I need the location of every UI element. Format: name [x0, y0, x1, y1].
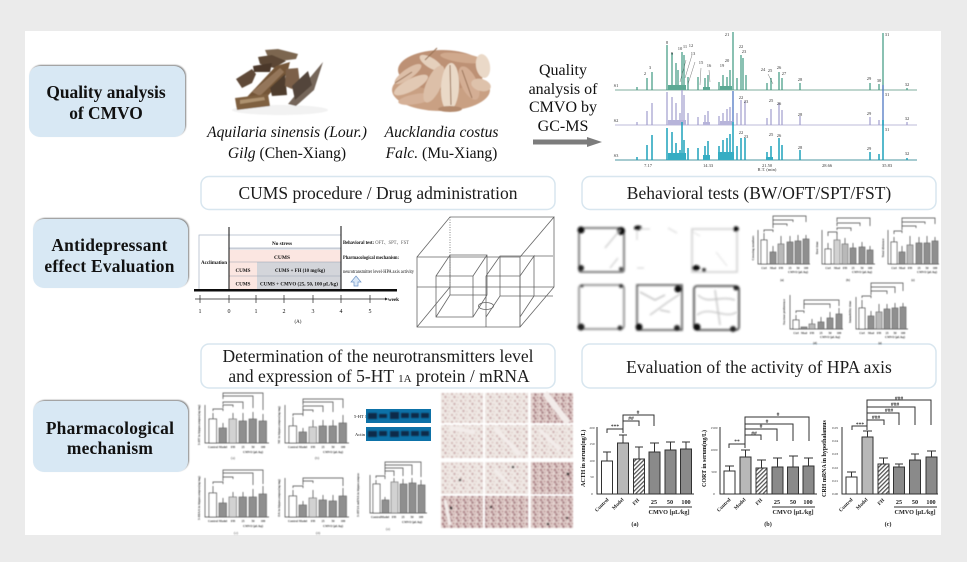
bar chart: 5-HT1A mRNA (e): 100 — [419, 515, 424, 519]
bar chart: neurotransmitter (a): Model — [219, 445, 227, 449]
bar chart: neurotransmitter (b): NE in hippocampus(ng/mg) — [277, 406, 281, 444]
small bar chart: behavior (c): Mod — [899, 266, 905, 270]
bar chart: CORT in serum (b): CMVO [μL/kg] — [772, 509, 814, 516]
bar chart: neurotransmitter (d): CMVO (μL/kg) — [323, 524, 343, 528]
heading: Evaluation of HPA axis: Evaluation of the activity of HPA axis — [626, 357, 892, 377]
caption: Aucklandia costus — [384, 124, 498, 162]
small bar chart: behavior (a) — [751, 216, 810, 282]
western blot: 5-HT1A and actin: Actin — [355, 432, 366, 437]
schedule notes — [343, 240, 415, 275]
peak numbers: 32 — [905, 116, 909, 121]
bar chart: neurotransmitter (d): 25 — [322, 519, 325, 523]
peak numbers: 31 — [885, 92, 889, 97]
heading: Evaluation of HPA axis — [582, 344, 936, 388]
small bar chart: behavior (a): Crossing numbers — [751, 235, 755, 260]
week axis — [195, 295, 400, 325]
week axis: 3 — [312, 309, 314, 315]
peak numbers: S2 — [614, 118, 618, 123]
apparatus: 3D test box — [417, 217, 554, 327]
peak numbers: 22 — [739, 44, 743, 49]
bar chart: neurotransmitter (c): CMVO (μL/kg) — [243, 524, 263, 528]
small bar chart: behavior (e): Mod — [868, 331, 874, 335]
small bar chart: behavior (c): 50 — [926, 266, 929, 270]
peak numbers: 21 — [725, 32, 729, 37]
western blot: 5-HT1A and actin: 5-HT 1A — [354, 414, 371, 419]
bar chart: neurotransmitter (b): 50 — [332, 445, 335, 449]
text: Quality analysis of CMVO by GC-MS — [529, 62, 598, 135]
peak numbers: 30 — [877, 78, 882, 83]
peak numbers: 28 — [798, 112, 803, 117]
small bar chart: behavior (c): 25 — [918, 266, 921, 270]
small bar chart: behavior (e): Immobility time — [848, 300, 852, 323]
peak numbers: 24 — [761, 67, 766, 72]
peak numbers: 13 — [691, 51, 696, 56]
bar chart: CRH mRNA in hypothalamus (c): FH — [877, 498, 886, 507]
peak numbers: 20 — [725, 58, 730, 63]
bar chart: neurotransmitter (a): (a) — [231, 456, 236, 460]
bar chart: neurotransmitter (a): Control — [208, 445, 218, 449]
week axis: 5 — [368, 309, 372, 315]
IHC micrographs — [441, 393, 573, 528]
bar chart: neurotransmitter (c): 25 — [242, 519, 245, 523]
peak numbers: 25 — [768, 68, 773, 73]
caption: Aucklandia costus: Falc. (Mu-Xiang) — [385, 145, 497, 162]
small bar chart: behavior (e): FH — [877, 331, 882, 335]
peak numbers: 11 — [683, 44, 687, 49]
caption: Aquilaria sinensis — [206, 124, 367, 162]
text: Quality analysis of CMVO by GC-MS: GC-MS — [538, 118, 588, 135]
row label: Quality analysis of CMVO: Quality analysis — [46, 82, 166, 102]
bar chart: neurotransmitter (b) — [277, 399, 349, 460]
small bar chart: behavior (d): 50 — [828, 331, 832, 335]
bar chart: CRH mRNA in hypothalamus (c) — [822, 396, 938, 528]
bar chart: ACTH in serum (a) — [580, 410, 694, 528]
bar chart: ACTH in serum (a): ## — [628, 416, 634, 422]
small bar chart: behavior (a): 25 — [788, 266, 792, 270]
row label: Antidepressant effect Evaluation: Antidepressant — [51, 235, 168, 255]
bar chart: ACTH in serum (a): (a) — [631, 521, 639, 528]
time axis — [644, 163, 893, 172]
schedule notes: neurotransmitter level·HPA axis activity — [343, 270, 415, 275]
small bar chart: behavior (e): 100 — [901, 331, 906, 335]
bar chart: neurotransmitter (a): 25 — [242, 445, 245, 449]
bar chart: CORT in serum (b): 500 — [711, 470, 717, 474]
small bar chart: behavior (d): Ctrl — [793, 331, 799, 335]
bar chart: neurotransmitter (c): (c) — [234, 531, 239, 535]
peak numbers: 26 — [777, 133, 782, 138]
schedule notes: Pharmacological mechanism: — [343, 255, 399, 261]
bar chart: CORT in serum (b): Model — [733, 497, 748, 511]
thick time bar — [194, 289, 397, 292]
small bar chart: behavior (c): Total distance — [881, 238, 885, 257]
peak numbers — [614, 32, 909, 158]
text: Quality analysis of CMVO by GC-MS: CMVO by — [529, 99, 597, 116]
bar chart: neurotransmitter (d): (d) — [316, 531, 321, 535]
peak numbers: 15 — [699, 60, 704, 65]
trace S2 — [615, 85, 917, 125]
peak numbers: S3 — [614, 153, 619, 158]
bar chart: neurotransmitter (c): 5-HIAA in hippocampus(ng/mg) — [197, 476, 201, 520]
bar chart: neurotransmitter (c): Control — [208, 519, 218, 523]
bar chart: CRH mRNA in hypothalamus (c): Model — [855, 497, 870, 511]
heading: Determination of neurotransmitters — [201, 344, 555, 388]
heading: Behavioral tests — [582, 176, 936, 210]
bar chart: neurotransmitter (d): Model — [299, 519, 307, 523]
small bar chart: behavior (c): Ctrl — [891, 266, 897, 270]
trace C2 — [634, 226, 677, 268]
bar chart: ACTH in serum (a): 50 — [590, 475, 594, 479]
peak numbers: 27 — [782, 71, 787, 76]
small bar chart: behavior (c): FH — [908, 266, 913, 270]
row label: Pharmacological mechanism — [33, 401, 188, 472]
peak numbers: 2 — [644, 71, 646, 76]
schedule notes: Behavioral test: OFT、SPT、FST — [343, 240, 410, 246]
treatment rows: CUMS — [236, 282, 250, 288]
peak numbers: 9 — [671, 51, 674, 56]
peak numbers: 31 — [885, 127, 889, 132]
small bar chart: behavior (e): CMVO (μL/kg) — [885, 335, 905, 339]
trace S3 — [615, 120, 917, 160]
week axis: 2 — [282, 309, 286, 315]
small bar chart: behavior (a): CMVO (μL/kg) — [788, 270, 808, 274]
week axis: 1 — [254, 309, 258, 315]
text: Quality analysis of CMVO by GC-MS: analysis of — [529, 81, 598, 98]
small bar chart: behavior (b): Mod — [834, 266, 840, 270]
timeline: CUMS procedure — [194, 226, 415, 325]
treatment rows: Acclimation — [201, 260, 227, 266]
trace C1 — [578, 226, 625, 272]
bar chart: CRH mRNA in hypothalamus (c): ### — [891, 402, 899, 408]
week axis: week — [388, 297, 400, 303]
trace S1 — [615, 32, 917, 90]
small bar chart: behavior (b): 50 — [860, 266, 864, 270]
bar chart: 5-HT1A mRNA (e): FH — [392, 515, 397, 519]
caption: Aucklandia costus: Aucklandia costus — [384, 124, 498, 141]
peak numbers: 29 — [867, 146, 872, 151]
peak numbers: 28 — [798, 77, 803, 82]
bar chart: CRH mRNA in hypothalamus (c): ### — [885, 408, 893, 414]
small bar chart: behavior (a): 100 — [804, 266, 809, 270]
bar chart: neurotransmitter (b): Control — [288, 445, 298, 449]
bar chart: neurotransmitter (b): (b) — [315, 456, 320, 460]
small bar chart: behavior (e): Ctrl — [859, 331, 865, 335]
icon: up arrow — [351, 276, 361, 286]
arrow — [533, 137, 602, 147]
time axis: R.T. (min) — [758, 167, 777, 172]
small bar chart: behavior (d): CMVO (μL/kg) — [820, 335, 840, 339]
caption: Aquilaria sinensis: Aquilaria sinensis (Lour.) — [206, 124, 367, 141]
bar chart: neurotransmitter (d): 50 — [332, 519, 335, 523]
photo: Chen-Xiang agarwood pieces — [232, 49, 328, 115]
week axis: 1 — [198, 309, 202, 315]
small bar chart: behavior (b): FH — [843, 266, 848, 270]
bar chart: ACTH in serum (a): 200 — [589, 426, 595, 430]
bar chart: 5-HT1A mRNA (e): Control — [371, 515, 381, 519]
bar chart: CORT in serum (b): CORT in serum(ng/L) — [701, 430, 708, 487]
small bar chart: behavior (b): 100 — [868, 266, 873, 270]
peak numbers: 31 — [885, 32, 889, 37]
bar chart: neurotransmitter (b): Model — [299, 445, 307, 449]
small bar chart: behavior (b): (b) — [846, 278, 850, 282]
bar chart: CRH mRNA in hypothalamus (c): 0.03 — [832, 452, 838, 456]
peak numbers: 22 — [739, 95, 743, 100]
bar chart: neurotransmitter (a): CMVO (μL/kg) — [243, 450, 263, 454]
small bar chart: behavior (e): (e) — [878, 341, 882, 345]
bar chart: CORT in serum (b): # — [760, 424, 763, 430]
bar chart: ACTH in serum (a): 50 — [667, 499, 673, 506]
bar chart: ACTH in serum (a): 0 — [591, 492, 593, 496]
heading: Behavioral tests: Behavioral tests (BW/OFT/SPT/FST) — [627, 183, 891, 203]
bar chart: ACTH in serum (a): ACTH in serum(ng/L) — [580, 430, 587, 487]
small bar chart: behavior (a): 50 — [796, 266, 800, 270]
peak numbers: 12 — [689, 43, 693, 48]
bar chart: 5-HT1A mRNA (e): Model — [381, 515, 389, 519]
peak numbers: 25 — [769, 98, 774, 103]
treatment rows: CUMS — [236, 268, 250, 274]
trace C5 — [636, 285, 682, 331]
open field traces — [578, 226, 739, 332]
bar chart: neurotransmitter (b): FH — [311, 445, 316, 449]
peak numbers: S1 — [614, 83, 618, 88]
bar chart: neurotransmitter (b): 100 — [341, 445, 346, 449]
bar chart: neurotransmitter (d): FH — [311, 519, 316, 523]
peak numbers: 32 — [905, 151, 909, 156]
treatment rows: No stress — [272, 241, 292, 247]
small bar chart: behavior (a): FH — [779, 266, 784, 270]
bar chart: CORT in serum (b): FH — [755, 498, 764, 507]
bar chart: CORT in serum (b): # — [777, 412, 780, 418]
bar chart: CRH mRNA in hypothalamus (c): 100 — [926, 499, 936, 506]
time axis: 35.83 — [882, 163, 893, 168]
time axis: 7.17 — [644, 163, 653, 168]
bar chart: ACTH in serum (a): 150 — [589, 442, 595, 446]
bar chart: CORT in serum (b): 1000 — [710, 448, 718, 452]
caption: Aquilaria sinensis: Gilg (Chen-Xiang) — [228, 145, 346, 162]
heading: Determination of neurotransmitters: and expression of 5-HT 1A protein / mRNA — [228, 366, 530, 386]
bar chart: neurotransmitter (d): DA in hippocampus(ng/mg) — [277, 479, 281, 517]
bar chart: CORT in serum (b): 0 — [713, 492, 715, 496]
bar chart: ACTH in serum (a): CMVO [μL/kg] — [648, 509, 690, 516]
bar chart: CORT in serum (b): (b) — [764, 521, 772, 528]
trace C4 — [578, 284, 624, 330]
bar chart: 5-HT1A mRNA (e) — [356, 462, 427, 531]
bar chart: CORT in serum (b): Control — [716, 497, 733, 513]
bar chart: neurotransmitter (c): 100 — [261, 519, 266, 523]
bar chart: neurotransmitter (c): 50 — [252, 519, 255, 523]
western blot: 5-HT1A and actin — [354, 409, 431, 441]
heading: CUMS procedure: CUMS procedure / Drug administration — [239, 183, 518, 203]
small bar chart: behavior (d): Mod — [801, 331, 807, 335]
small bar chart: behavior (d) — [782, 295, 843, 345]
bar chart: ACTH in serum (a): 100 — [589, 459, 595, 463]
week axis: 4 — [340, 309, 342, 315]
bar chart: neurotransmitter (b): CMVO (μL/kg) — [323, 450, 343, 454]
peak numbers: 32 — [905, 82, 909, 87]
row label: Quality analysis of CMVO — [29, 66, 185, 137]
bar chart: CRH mRNA in hypothalamus (c): ### — [872, 415, 880, 421]
bar chart: CORT in serum (b): 25 — [774, 499, 780, 506]
peak numbers: 26 — [777, 65, 782, 70]
bar chart: ACTH in serum (a): 25 — [651, 499, 657, 506]
bar chart: CRH mRNA in hypothalamus (c): *** — [856, 422, 864, 428]
peak numbers: 28 — [798, 145, 803, 150]
bar chart: CRH mRNA in hypothalamus (c): 0.02 — [832, 466, 838, 470]
small bar chart: behavior (e): 50 — [894, 331, 897, 335]
small bar chart: behavior (c): 100 — [933, 266, 938, 270]
small bar chart: behavior (b): CMVO (μL/kg) — [852, 270, 872, 274]
trace C6 — [694, 286, 739, 332]
text: Quality analysis of CMVO by GC-MS: Quality — [539, 62, 587, 79]
bar chart: neurotransmitter (d): Control — [288, 519, 298, 523]
small bar chart: behavior (d): 100 — [837, 331, 842, 335]
bar chart: 5-HT1A mRNA (e): 5-HT1A mRNA in hippocampus — [356, 472, 360, 517]
peak leader lines — [680, 55, 773, 85]
bar chart: CORT in serum (b): # — [766, 419, 769, 425]
small bar chart: behavior (c) — [881, 218, 939, 282]
bar chart: ACTH in serum (a): *** — [611, 424, 619, 430]
bar chart: CORT in serum (b): 1500 — [710, 426, 718, 430]
bar chart: ACTH in serum (a): # — [637, 410, 640, 416]
peak numbers: 3 — [649, 65, 652, 70]
chromatogram: GC-MS S1 S2 S3 — [614, 32, 917, 172]
bar chart: neurotransmitter (b): 25 — [322, 445, 325, 449]
bar chart: CRH mRNA in hypothalamus (c): 0.00 — [832, 492, 838, 496]
bar chart: ACTH in serum (a): Control — [594, 497, 611, 513]
bar chart: CRH mRNA in hypothalamus (c): CMVO [μL/kg] — [894, 509, 936, 516]
treatment rows — [199, 226, 341, 290]
bar chart: neurotransmitter (d) — [277, 478, 349, 535]
peak numbers: 19 — [720, 63, 725, 68]
peak numbers: 16 — [707, 63, 712, 68]
bar chart: CORT in serum (b) — [701, 412, 817, 528]
row label: Antidepressant effect Evaluation: effect Evaluation — [44, 256, 175, 276]
small bar chart: behavior (d): 25 — [820, 331, 823, 335]
bar chart: 5-HT1A mRNA (e): 50 — [410, 515, 414, 519]
small bar chart: behavior (b): Rest time — [815, 241, 819, 254]
peak numbers: 8 — [666, 40, 669, 45]
peak numbers: 23 — [742, 49, 747, 54]
bar chart: neurotransmitter (a): 100 — [261, 445, 266, 449]
row label: Antidepressant effect Evaluation — [33, 219, 188, 288]
bar chart: CORT in serum (b): ## — [751, 431, 757, 437]
small bar chart: behavior (e): 25 — [886, 331, 889, 335]
bar chart: CRH mRNA in hypothalamus (c): ### — [895, 396, 903, 402]
bar chart: ACTH in serum (a): Model — [611, 497, 626, 511]
peak numbers: 29 — [867, 76, 872, 81]
bar chart: neurotransmitter (a): 50 — [252, 445, 255, 449]
treatment rows: CUMS — [274, 255, 290, 261]
small bar chart: behavior (b) — [815, 218, 875, 282]
treatment rows: CUMS + CMVO (25, 50, 100 μL/kg) — [260, 280, 338, 288]
small bar chart: behavior (d): FH — [810, 331, 815, 335]
bar chart: 5-HT1A mRNA (e): (e) — [386, 527, 391, 531]
small bar chart: behavior (b): 25 — [852, 266, 855, 270]
week axis: 0 — [228, 309, 230, 315]
time axis: 28.66 — [822, 163, 833, 168]
peak numbers: 25 — [769, 132, 774, 137]
peak numbers: 23 — [744, 134, 749, 139]
small bar chart: behavior (a): Mod — [770, 266, 776, 270]
bar chart: CRH mRNA in hypothalamus (c): 0.04 — [832, 439, 838, 443]
small bar chart: behavior (d): (d) — [813, 341, 817, 345]
heading: CUMS procedure — [201, 176, 555, 210]
bar chart: neurotransmitter (a): FH — [231, 445, 236, 449]
small bar chart: behavior (e) — [848, 283, 908, 345]
peak numbers: 10 — [678, 46, 683, 51]
bar chart: CRH mRNA in hypothalamus (c): 50 — [912, 499, 918, 506]
small bar chart: behavior (a): Ctrl — [761, 266, 767, 270]
bar chart: neurotransmitter (c): Model — [219, 519, 227, 523]
bar chart: neurotransmitter (c): FH — [231, 519, 236, 523]
row label: Pharmacological mechanism: mechanism — [67, 438, 153, 458]
time axis: 14.33 — [703, 163, 714, 168]
time axis: 21.50 — [762, 163, 773, 168]
bar chart: CRH mRNA in hypothalamus (c): 25 — [896, 499, 902, 506]
bar chart: CRH mRNA in hypothalamus (c): 0.05 — [832, 426, 838, 430]
small bar chart: behavior (c): CMVO (μL/kg) — [917, 270, 937, 274]
bar chart: CRH mRNA in hypothalamus (c): 0.01 — [832, 479, 838, 483]
bar chart: 5-HT1A mRNA (e): 25 — [402, 515, 405, 519]
bar chart: 5-HT1A mRNA (e): CMVO (μL/kg) — [402, 520, 422, 524]
peak numbers: 23 — [744, 99, 749, 104]
peak numbers: 26 — [777, 101, 782, 106]
peak numbers: 22 — [739, 130, 743, 135]
photo: Mu-Xiang root slices — [391, 48, 492, 112]
treatment rows: CUMS + FH (10 mg/kg) — [275, 267, 325, 274]
bar chart: CRH mRNA in hypothalamus (c): (c) — [885, 521, 891, 528]
small bar chart: behavior (a): (a) — [780, 278, 784, 282]
row label: Quality analysis of CMVO: of CMVO — [69, 103, 143, 123]
heading: Determination of neurotransmitters: Determination of the neurotransmitters level — [222, 346, 534, 366]
trace C3 — [692, 226, 739, 272]
bar chart: ACTH in serum (a): 100 — [681, 499, 691, 506]
row label: Pharmacological mechanism: Pharmacological — [46, 418, 174, 438]
bar chart: CRH mRNA in hypothalamus (c): Control — [838, 497, 855, 513]
bar chart: neurotransmitter (a): 5-HT in hippocampus(ng/mg) — [197, 405, 201, 445]
bar chart: neurotransmitter (d): 100 — [341, 519, 346, 523]
bar chart: CORT in serum (b): ** — [734, 439, 740, 445]
small bar chart: behavior (c): (c) — [911, 278, 915, 282]
bar chart: CORT in serum (b): 50 — [790, 499, 796, 506]
small bar chart: behavior (d): Sucrose preference — [782, 299, 786, 325]
bar chart: CORT in serum (b): 100 — [803, 499, 813, 506]
small bar chart: behavior (b): Ctrl — [825, 266, 831, 270]
bar chart: CRH mRNA in hypothalamus (c): CRH mRNA in hypothalamus — [822, 419, 828, 497]
week axis: (A) — [295, 320, 302, 325]
peak numbers: 29 — [867, 111, 872, 116]
bar chart: neurotransmitter (c) — [197, 470, 269, 535]
bar chart: ACTH in serum (a): FH — [632, 498, 641, 507]
bar chart: neurotransmitter (a) — [197, 393, 269, 460]
